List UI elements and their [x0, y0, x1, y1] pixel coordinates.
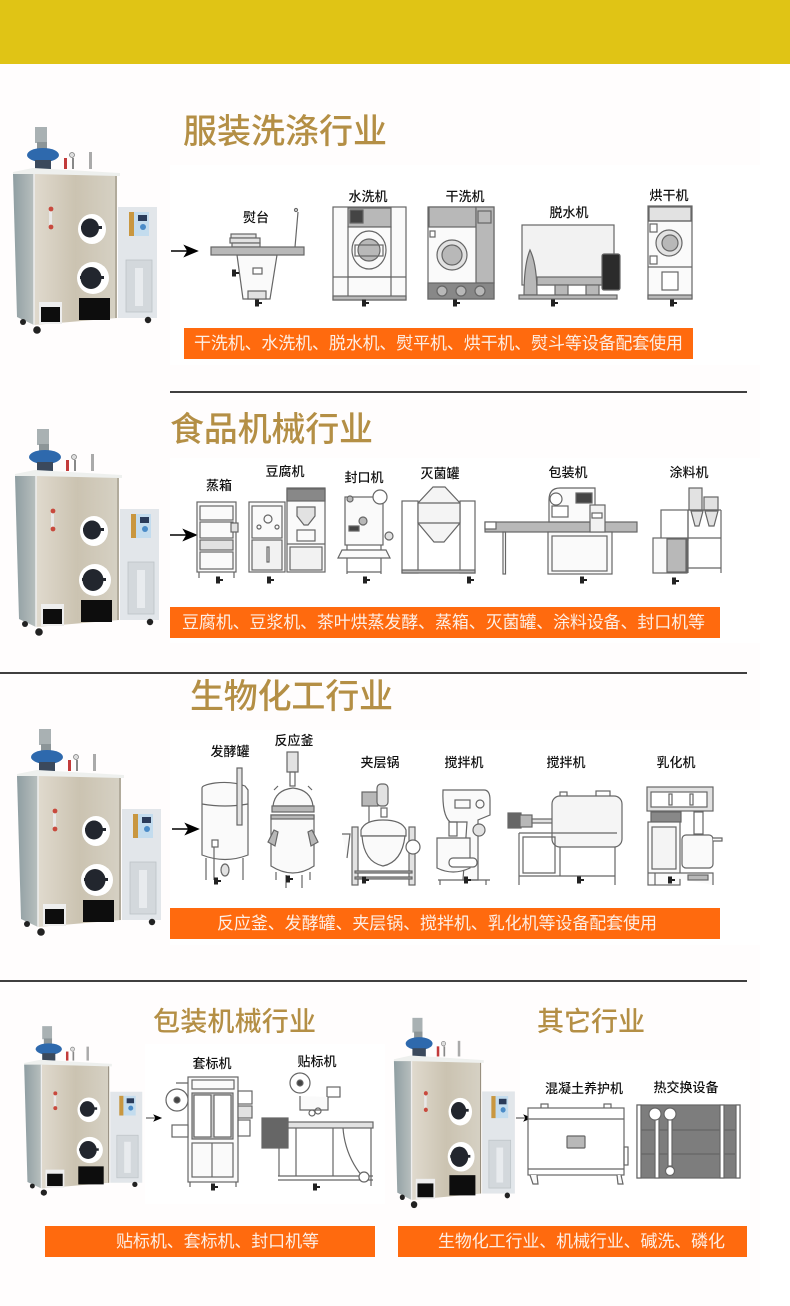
machine: jacketed kettle	[342, 784, 420, 885]
machine: fermentation tank	[202, 768, 248, 880]
section divider lines	[0, 392, 747, 981]
heading: garment laundry: 服装洗涤行业	[183, 113, 387, 151]
label: label applicator: 贴标机	[297, 1054, 337, 1069]
machine: packaging machine	[485, 488, 637, 574]
machine: water washer	[333, 207, 406, 300]
machine: planetary mixer	[437, 790, 490, 885]
caption: packaging: 贴标机、套标机、封口机等	[116, 1232, 319, 1251]
label: ironing table: 熨台	[243, 210, 269, 225]
orange bar: chemical	[170, 908, 720, 939]
label: fermentation tank: 发酵罐	[210, 744, 250, 759]
machine: heat exchanger	[637, 1105, 740, 1178]
label: reactor: 反应釜	[274, 733, 314, 748]
machine: concrete curing	[528, 1104, 628, 1184]
caption: food: 豆腐机、豆浆机、茶叶烘蒸发酵、蒸箱、灭菌罐、涂料设备、封口机等	[182, 613, 705, 632]
label: sleeve labeler: 套标机	[192, 1056, 232, 1071]
machine: steam cabinet	[197, 502, 238, 578]
arrow to laundry machines	[171, 246, 197, 256]
arrow to chemical machines	[172, 824, 198, 834]
caption: other: 生物化工行业、机械行业、碱洗、磷化	[438, 1232, 725, 1251]
orange bar: laundry	[184, 328, 693, 359]
label: planetary mixer: 搅拌机	[444, 755, 484, 770]
label: steam cabinet: 蒸箱	[206, 478, 232, 493]
label: concrete curing: 混凝土养护机	[545, 1081, 623, 1096]
machine: sterilization tank	[402, 487, 475, 573]
heading: other industries: 其它行业	[537, 1007, 645, 1037]
machine: ironing table	[211, 208, 304, 299]
label: coating machine: 涂料机	[669, 465, 709, 480]
label: water washer: 水洗机	[348, 189, 388, 204]
boiler illustration 4	[24, 1026, 142, 1196]
label: emulsifier: 乳化机	[656, 755, 696, 770]
arrow to food machines	[170, 530, 196, 540]
label: sterilization tank: 灭菌罐	[420, 466, 460, 481]
panel: biochemical industry	[17, 678, 722, 939]
heading: packaging machinery: 包装机械行业	[153, 1007, 316, 1037]
machine: tofu machine	[249, 488, 325, 572]
boiler illustration 5	[394, 1018, 515, 1208]
label: tofu machine: 豆腐机	[265, 464, 305, 479]
machine: emulsifier	[647, 787, 722, 885]
top yellow banner	[0, 0, 790, 64]
machine: spin dryer	[519, 225, 620, 299]
panel: packaging machinery	[24, 1007, 375, 1257]
orange bar: food	[170, 607, 720, 638]
heading: food machinery: 食品机械行业	[170, 411, 373, 449]
boiler illustration 2	[15, 429, 159, 636]
label: jacketed kettle: 夹层锅	[360, 755, 400, 770]
orange bar: packaging	[45, 1226, 375, 1257]
machine: horizontal mixer	[508, 791, 622, 885]
machine: coating machine	[653, 488, 721, 573]
boiler illustration 1	[13, 127, 157, 334]
machine: reactor	[268, 752, 318, 888]
panel: food machinery industry	[15, 411, 721, 638]
heading: biochemical: 生物化工行业	[190, 678, 393, 716]
panel: garment laundry industry	[13, 113, 693, 359]
caption: chemical: 反应釜、发酵罐、夹层锅、搅拌机、乳化机等设备配套使用	[217, 913, 657, 933]
label: packaging machine: 包装机	[548, 465, 588, 480]
label: spin dryer: 脱水机	[549, 205, 589, 220]
orange bar: other	[398, 1226, 747, 1257]
label: horizontal mixer: 搅拌机	[546, 755, 586, 770]
label: heat exchanger: 热交换设备	[653, 1080, 719, 1095]
label: sealing machine: 封口机	[344, 470, 384, 485]
machine: sleeve labeler	[166, 1077, 252, 1187]
caption: laundry: 干洗机、水洗机、脱水机、熨平机、烘干机、熨斗等设备配套使用	[194, 333, 683, 353]
label: tumble dryer: 烘干机	[649, 188, 689, 203]
panel: other industries	[394, 1007, 747, 1257]
machine: sealing machine	[338, 490, 393, 574]
arrow to packaging machines	[146, 1115, 161, 1121]
machine: label applicator	[262, 1073, 373, 1186]
machine: dry cleaner	[428, 207, 494, 299]
boiler illustration 3	[17, 729, 161, 936]
arrow to other machines	[516, 1115, 531, 1121]
label: dry cleaner: 干洗机	[445, 189, 485, 204]
machine: tumble dryer	[648, 206, 692, 299]
